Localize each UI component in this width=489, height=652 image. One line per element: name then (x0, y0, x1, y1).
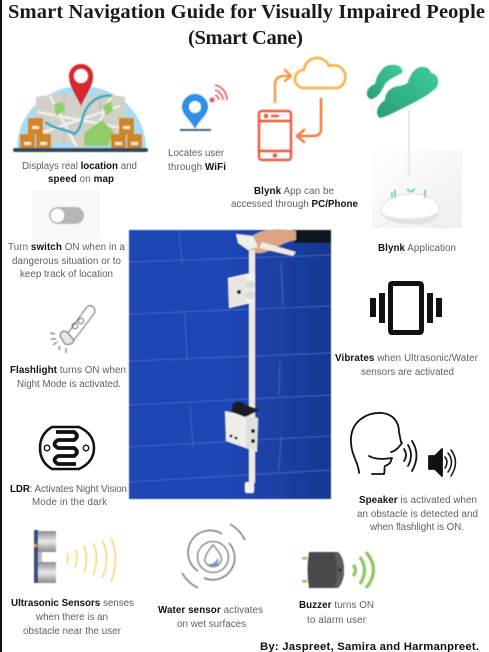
text: flashlight: Flashlight turns ON when (10, 365, 126, 376)
text: water sensor: Water sensor activates (158, 605, 263, 616)
text: switch: dangerous situation or to (12, 256, 122, 267)
text: speaker: when flashlight is ON. (369, 522, 464, 533)
icon: Blynk cloud and hub (367, 65, 462, 229)
text: buzzer: to alarm user (307, 615, 367, 626)
photo: smart cane against blue wall (129, 229, 331, 499)
text: LDR: LDR: Activates Night Vision (10, 484, 127, 495)
text: WiFi: Locates user (168, 148, 225, 159)
title (8, 1, 485, 49)
text: Blynk application: Blynk Application (378, 243, 456, 254)
text: switch: keep track of location (20, 269, 113, 280)
text: speaker: an obstacle is detected and (357, 509, 478, 520)
text: speaker: Speaker is activated when (359, 495, 477, 506)
icon: phone and cloud sync (259, 58, 345, 160)
icon: flashlight (50, 306, 95, 353)
text: vibrates: Vibrates when Ultrasonic/Water (335, 353, 478, 364)
icon: water sensor (182, 524, 245, 588)
text: vibrates: sensors are activated (361, 367, 454, 378)
title: Smart Navigation Guide for Visually Impaired People (8, 1, 485, 23)
icon: talking head and speaker (351, 413, 456, 476)
text: Blynk app access: accessed through PC/Phone (231, 199, 358, 210)
text: LDR: Mode in the dark (32, 497, 107, 508)
icon: LDR (40, 427, 94, 469)
icon: vibrating phone (370, 281, 442, 335)
text: switch: Turn switch ON when in a (8, 242, 125, 253)
icon: toggle switch (32, 190, 100, 240)
text: ultrasonic: obstacle near the user (23, 626, 122, 637)
text: water sensor: on wet surfaces (177, 619, 246, 630)
text: location: speed on map (48, 174, 114, 185)
text: location: Displays real location and (22, 161, 137, 172)
title: (Smart Cane) (188, 27, 303, 49)
text: buzzer: Buzzer turns ON (299, 600, 374, 611)
text: ultrasonic: Ultrasonic Sensors senses (11, 598, 134, 609)
icon: map with location pin (13, 64, 148, 152)
icon: buzzer (302, 552, 374, 588)
text: ultrasonic: when there is an (35, 612, 108, 623)
icon: WiFi location pin (180, 85, 227, 131)
text: WiFi: through WiFi (168, 162, 226, 173)
text: flashlight: Night Mode is activated. (17, 379, 121, 390)
text: Blynk app access: Blynk App can be (254, 186, 334, 197)
icon: ultrasonic sensor (34, 530, 116, 583)
